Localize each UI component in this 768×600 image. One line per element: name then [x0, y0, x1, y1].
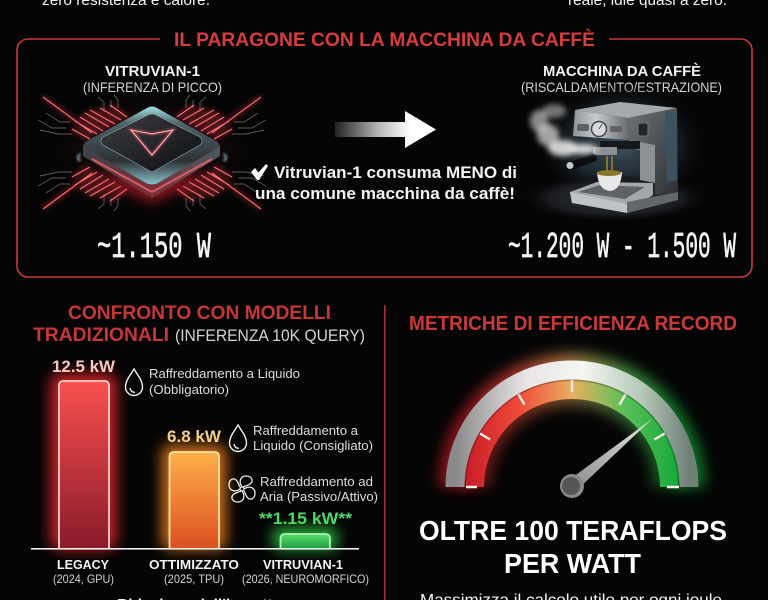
- icon: espresso machine: [520, 83, 710, 222]
- cooling note: liquid mandatory: [149, 366, 300, 397]
- chart title line 2: TRADIZIONALI: [33, 324, 169, 346]
- cooling note: air: Raffreddamento ad: [260, 474, 373, 489]
- headline metric: OLTRE 100 TERAFLOPS: [419, 515, 727, 546]
- label: coffee machine: MACCHINA DA CAFFÈ: [543, 63, 701, 80]
- bar: legacy: [51, 357, 116, 549]
- sublabel: heating/extraction: (RISCALDAMENTO/ESTRAZIONE): [521, 79, 722, 95]
- icon: water drop: [230, 425, 246, 452]
- value: Vitruvian-1 wattage: ~1.150 W: [97, 227, 211, 268]
- vertical divider: [384, 305, 386, 600]
- cooling note: liquid mandatory: (Obbligatorio): [149, 382, 229, 397]
- panel: bar chart comparison: [31, 302, 378, 600]
- icon: neural chip: [38, 90, 266, 214]
- sublabel: peak inference: (INFERENZA DI PICCO): [83, 79, 222, 95]
- cooling note: air: Aria (Passivo/Attivo): [260, 489, 378, 504]
- panel: efficiency metrics: [409, 313, 737, 600]
- label: Vitruvian-1: VITRUVIAN-1: [105, 63, 200, 80]
- cooling note: liquid mandatory: Raffreddamento a Liquido: [149, 366, 300, 381]
- arrow: [335, 111, 436, 148]
- value: 1.15 kW: **1.15 kW**: [259, 509, 352, 528]
- bar: optimised: [162, 427, 226, 549]
- axis label: optimised: (2025, TPU): [164, 572, 224, 586]
- panel: coffee machine comparison: [17, 28, 752, 277]
- icon: water drop: [126, 369, 142, 396]
- axis label: Vitruvian-1: VITRUVIAN-1: [263, 557, 343, 572]
- chart baseline: [31, 548, 359, 550]
- cooling note: air: [260, 474, 378, 504]
- axis label: legacy: LEGACY: [57, 557, 109, 572]
- axis label: optimised: [149, 557, 239, 586]
- value: 12.5 kW: 12.5 kW: [52, 357, 116, 376]
- headline metric: PER WATT: [504, 548, 641, 579]
- gauge needle: [569, 419, 652, 490]
- axis label: legacy: [53, 557, 114, 586]
- callout line 1: Vitruvian-1 consuma MENO di: [274, 163, 517, 182]
- cooling note: liquid recommended: Raffreddamento a: [253, 423, 359, 438]
- value: 6.8 kW: 6.8 kW: [167, 427, 222, 446]
- icon: check mark: [251, 164, 268, 180]
- chart title line 1: CONFRONTO CON MODELLI: [68, 302, 331, 324]
- axis label: optimised: OTTIMIZZATO: [149, 557, 239, 572]
- panel heading: IL PARAGONE CON LA MACCHINA DA CAFFÈ: [174, 28, 595, 51]
- headline metric: [419, 515, 727, 579]
- axis label: legacy: (2024, GPU): [53, 572, 114, 586]
- cooling note: liquid recommended: Liquido (Consigliato): [253, 438, 373, 453]
- cooling note: liquid recommended: [253, 423, 373, 453]
- axis label: Vitruvian-1: [242, 557, 369, 586]
- gauge: [455, 370, 689, 498]
- panel frame: [17, 39, 752, 277]
- panel heading: METRICHE DI EFFICIENZA RECORD: [409, 313, 737, 335]
- icon: fan: [229, 476, 255, 502]
- callout line 2: una comune macchina da caffè!: [255, 184, 515, 203]
- callout: consumes less: [251, 163, 517, 203]
- gauge hub: [560, 474, 584, 498]
- axis label: Vitruvian-1: (2026, NEUROMORFICO): [242, 572, 369, 586]
- bar: Vitruvian-1: [259, 509, 352, 549]
- chart subtitle: (INFERENZA 10K QUERY): [175, 326, 365, 345]
